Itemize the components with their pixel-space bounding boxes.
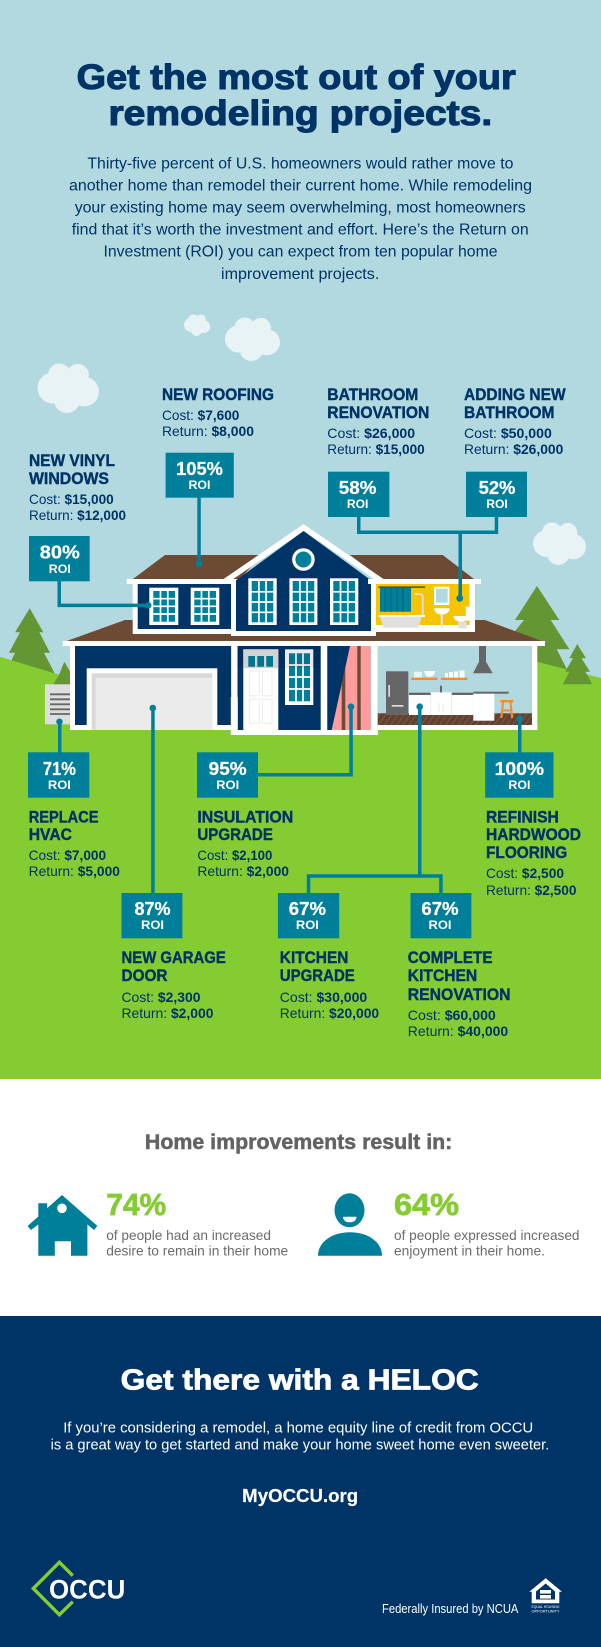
icon: equal housing opportunity xyxy=(529,1578,562,1614)
garage door xyxy=(87,668,217,730)
badge: 67% complete kitchen: ROI xyxy=(428,918,452,932)
label: new garage door: DOOR xyxy=(122,966,168,985)
website: MyOCCU.org xyxy=(242,1486,358,1506)
counter and cabinets xyxy=(409,686,473,715)
intro paragraph xyxy=(69,155,532,283)
badge: 67% kitchen upgrade xyxy=(278,893,339,938)
connector: HVAC xyxy=(56,718,63,753)
cloud small xyxy=(184,314,210,336)
label: new vinyl windows xyxy=(29,451,126,523)
label: adding new bathroom: Cost: $50,000 xyxy=(464,426,552,441)
intro paragraph: Investment (ROI) you can expect from ten popular home xyxy=(104,243,498,260)
label: new garage door: Return: $2,000 xyxy=(122,1006,214,1021)
stat: 74% xyxy=(106,1187,288,1259)
panel: results xyxy=(0,1079,601,1316)
label: refinish hardwood flooring: HARDWOOD xyxy=(486,825,581,844)
cloud left xyxy=(38,364,99,413)
front door xyxy=(243,649,278,730)
badge: 67% complete kitchen xyxy=(410,893,471,938)
label: refinish hardwood flooring: FLOORING xyxy=(486,843,567,862)
label: complete kitchen renovation: Cost: $60,000 xyxy=(408,1008,496,1023)
badge: 58%: 58% xyxy=(339,478,376,498)
title: Get the most out of your xyxy=(77,58,516,97)
badge: 52%: 52% xyxy=(479,478,515,498)
label: new garage door: NEW GARAGE xyxy=(122,948,226,967)
panel: HELOC footer xyxy=(0,1316,601,1647)
label: new garage door: Cost: $2,300 xyxy=(122,990,200,1005)
centre wall xyxy=(231,646,378,735)
label: insulation upgrade: INSULATION xyxy=(197,807,293,826)
sky background xyxy=(0,0,601,740)
badge: 87%: ROI xyxy=(141,918,164,932)
badge: 87% xyxy=(122,893,182,938)
stat: 64%: 64% xyxy=(394,1187,459,1222)
label: complete kitchen renovation: COMPLETE xyxy=(408,948,492,967)
gable round window xyxy=(292,548,315,571)
results heading: Home improvements result in: xyxy=(145,1131,452,1154)
badge: 71%: ROI xyxy=(48,778,71,792)
upper left roof xyxy=(133,555,262,579)
badge: 67% complete kitchen: 67% xyxy=(421,899,459,919)
cloud right xyxy=(533,522,586,565)
label: insulation upgrade xyxy=(197,807,293,879)
label: bathroom renovation: Return: $15,000 xyxy=(327,442,425,457)
label: new vinyl windows: Return: $12,000 xyxy=(29,508,126,523)
federally insured text: Federally Insured by NCUA xyxy=(382,1602,519,1616)
connector: hardwood xyxy=(516,715,523,753)
badge: 71%: 71% xyxy=(43,759,76,779)
label: replace HVAC: HVAC xyxy=(29,825,72,844)
shower curtain xyxy=(378,586,425,612)
stat: 74%: desire to remain in their home xyxy=(106,1243,288,1259)
upper left wing xyxy=(127,579,238,634)
badge: 105% xyxy=(166,453,234,498)
footer paragraph: If you’re considering a remodel, a home equity line of credit from OCCU xyxy=(63,1419,533,1436)
badge: 80%: 80% xyxy=(40,542,80,562)
label: replace HVAC xyxy=(29,807,120,879)
bathtub xyxy=(378,615,425,628)
label: new roofing: NEW ROOFING xyxy=(162,385,274,404)
bathroom room xyxy=(368,579,481,632)
tree: front left small xyxy=(50,662,75,690)
window: upper left 1 xyxy=(149,588,178,625)
stat: 74%: of people had an increased xyxy=(106,1227,271,1243)
window: gable 1 xyxy=(248,578,277,625)
fridge xyxy=(386,671,408,715)
stat: 64%: of people expressed increased xyxy=(394,1227,580,1243)
badge: 105%: 105% xyxy=(176,459,223,479)
label: bathroom renovation: RENOVATION xyxy=(327,403,429,422)
intro paragraph: Thirty-five percent of U.S. homeowners would rather move to xyxy=(87,155,513,172)
tree: front right small xyxy=(563,644,592,684)
stat: 64% xyxy=(394,1187,580,1259)
connector: windows xyxy=(58,581,152,608)
logo: OCCU: OCCU xyxy=(49,1574,125,1604)
label: insulation upgrade: UPGRADE xyxy=(197,825,273,844)
badge: 52%: ROI xyxy=(486,497,508,511)
label: refinish hardwood flooring: Return: $2,500 xyxy=(486,883,576,898)
label: insulation upgrade: Return: $2,000 xyxy=(197,864,289,879)
badge: 95%: 95% xyxy=(209,759,247,779)
badge: 58%: ROI xyxy=(347,497,368,511)
badge: 100%: 100% xyxy=(495,759,544,779)
tree: back right xyxy=(500,586,569,670)
label: refinish hardwood flooring: Cost: $2,500 xyxy=(486,866,564,881)
range hood xyxy=(473,646,493,673)
badge: 80% xyxy=(29,536,90,581)
badge: 58% xyxy=(328,472,389,517)
connector: kitchens xyxy=(307,703,443,894)
badge: 95%: ROI xyxy=(216,778,239,792)
label: adding new bathroom xyxy=(464,385,566,457)
footer heading: Get there with a HELOC xyxy=(121,1364,479,1396)
window: gable 3 xyxy=(330,578,358,625)
badge: 71% xyxy=(28,752,89,798)
stat: 74%: 74% xyxy=(106,1187,166,1222)
intro paragraph: improvement projects. xyxy=(221,266,379,283)
intro paragraph: another home than remodel their current home. While remodeling xyxy=(69,177,532,194)
label: kitchen upgrade: KITCHEN xyxy=(280,948,348,967)
badge: 67% kitchen upgrade: ROI xyxy=(296,918,319,932)
window: gable 2 xyxy=(289,578,317,625)
icon: house xyxy=(28,1195,97,1256)
icon: HVAC unit xyxy=(45,684,72,724)
label: complete kitchen renovation: Return: $40,000 xyxy=(408,1024,508,1039)
badge: 100%: ROI xyxy=(508,778,530,792)
stat: 64%: enjoyment in their home. xyxy=(394,1243,545,1259)
logo: OCCU xyxy=(33,1562,125,1615)
label: adding new bathroom: ADDING NEW xyxy=(464,385,566,404)
label: replace HVAC: Return: $5,000 xyxy=(29,864,120,879)
shelf right xyxy=(441,670,467,680)
shower pipe xyxy=(414,594,423,616)
label: kitchen upgrade xyxy=(280,948,379,1021)
label: refinish hardwood flooring: REFINISH xyxy=(486,807,559,826)
tree: back left xyxy=(5,608,55,674)
intro paragraph: your existing home may seem overwhelming, most homeowners xyxy=(75,199,526,216)
sink xyxy=(434,608,450,628)
badge: 100% xyxy=(485,752,554,798)
label: bathroom renovation xyxy=(327,385,429,457)
window: upper left 2 xyxy=(191,588,219,625)
intro paragraph: find that it’s worth the investment and effort. Here’s the Return on xyxy=(72,221,529,238)
toilet xyxy=(453,607,470,628)
label: bathroom renovation: BATHROOM xyxy=(327,385,418,404)
cloud top centre xyxy=(225,317,280,361)
badge: 80%: ROI xyxy=(49,562,71,576)
icon: equal housing opportunity: OPPORTUNITY xyxy=(532,1610,560,1614)
label: complete kitchen renovation: KITCHEN xyxy=(408,966,477,985)
title: remodeling projects. xyxy=(108,94,492,133)
label: new vinyl windows: NEW VINYL xyxy=(29,451,115,470)
label: new garage door xyxy=(122,948,226,1021)
garage wing xyxy=(70,646,231,730)
badge: 95% xyxy=(197,752,258,798)
label: replace HVAC: Cost: $7,000 xyxy=(29,848,106,863)
stool xyxy=(500,700,513,718)
label: replace HVAC: REPLACE xyxy=(29,807,99,826)
icon: person xyxy=(318,1193,382,1256)
porch shadow xyxy=(238,646,321,668)
footer paragraph: is a great way to get started and make your home sweet home even sweeter. xyxy=(51,1436,549,1453)
island xyxy=(473,692,509,721)
label: new roofing: Return: $8,000 xyxy=(162,424,254,439)
green hill ground xyxy=(0,657,601,1079)
label: refinish hardwood flooring xyxy=(486,807,581,898)
label: kitchen upgrade: UPGRADE xyxy=(280,966,355,985)
insulation wall cutaway xyxy=(321,646,378,735)
window: ground floor xyxy=(285,649,313,705)
icon: equal housing opportunity: EQUAL HOUSING xyxy=(532,1605,560,1609)
label: bathroom renovation: Cost: $26,000 xyxy=(327,426,415,441)
label: new vinyl windows: WINDOWS xyxy=(29,469,109,488)
label: new roofing xyxy=(162,385,274,439)
label: complete kitchen renovation xyxy=(408,948,510,1039)
title xyxy=(77,58,516,133)
label: adding new bathroom: Return: $26,000 xyxy=(464,442,563,457)
label: kitchen upgrade: Return: $20,000 xyxy=(280,1006,379,1021)
connector: garage door xyxy=(150,705,156,894)
label: insulation upgrade: Cost: $2,100 xyxy=(197,848,272,863)
connector: insulation xyxy=(258,703,354,776)
label: adding new bathroom: BATHROOM xyxy=(464,403,554,422)
floor xyxy=(378,713,532,725)
connector: bathrooms xyxy=(357,517,498,602)
badge: 52% xyxy=(466,472,527,517)
label: new vinyl windows: Cost: $15,000 xyxy=(29,492,114,507)
footer paragraph xyxy=(51,1419,549,1453)
lower eave xyxy=(63,641,545,646)
lower roof xyxy=(67,620,542,641)
connector: new roofing xyxy=(196,497,202,567)
gable section xyxy=(224,528,383,636)
badge: 105%: ROI xyxy=(188,478,210,492)
house xyxy=(63,528,545,735)
shelf left xyxy=(411,671,437,680)
kitchen room xyxy=(378,646,537,730)
badge: 67% kitchen upgrade: 67% xyxy=(289,899,326,919)
label: kitchen upgrade: Cost: $30,000 xyxy=(280,990,367,1005)
badge: 87%: 87% xyxy=(134,899,170,919)
mirror xyxy=(434,587,449,605)
label: complete kitchen renovation: RENOVATION xyxy=(408,985,510,1004)
label: new roofing: Cost: $7,600 xyxy=(162,408,239,423)
upper right roof xyxy=(350,555,474,579)
